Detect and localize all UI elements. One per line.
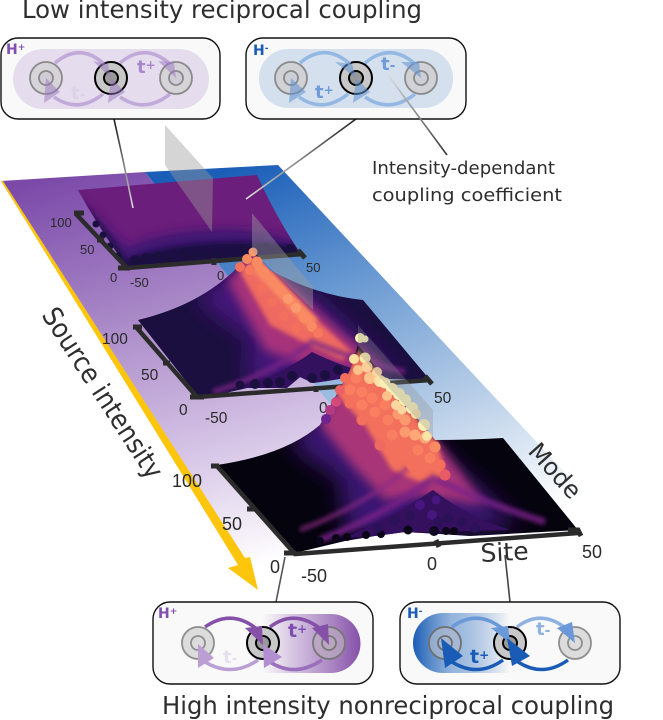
axes: high intensity	[172, 465, 602, 586]
slice plane: low intensity	[165, 125, 213, 232]
sites	[182, 627, 214, 659]
panel: high intensity H+: t	[288, 620, 297, 642]
panel: high intensity H+: t-	[223, 647, 238, 668]
axes: middle intensity: -50	[205, 410, 228, 427]
label: site: Site	[480, 537, 529, 568]
axes: middle intensity: 0	[179, 402, 188, 419]
axes: middle intensity: 100	[102, 331, 128, 348]
panel: high intensity H+	[153, 602, 373, 684]
axes: high intensity: 0	[270, 557, 280, 577]
axes: high intensity: 100	[172, 471, 202, 491]
panel: low intensity H-: t-	[381, 54, 396, 75]
label: mode: Mode	[523, 437, 587, 505]
panel: low intensity H+	[1, 38, 220, 119]
dots: high intensity scallops	[316, 496, 480, 545]
slice plane: high intensity	[358, 325, 433, 437]
surface: low intensity	[78, 175, 305, 270]
axes: high intensity: 50	[222, 514, 242, 534]
axes: high intensity: 0	[427, 554, 437, 574]
surface: high intensity	[217, 333, 578, 553]
axes: low intensity: 100	[50, 215, 72, 230]
axes: high intensity: -50	[301, 566, 327, 586]
panel: high intensity H-: +	[479, 648, 489, 662]
panel: high intensity H-	[400, 602, 620, 684]
panel: low intensity H-: +	[324, 83, 334, 97]
arrows	[205, 618, 322, 670]
callout: intensity-dependant coupling coefficient	[372, 158, 562, 206]
panel: high intensity H-: t-	[536, 619, 551, 640]
panel: low intensity H+: t-	[71, 83, 86, 104]
panel: low intensity H+: t	[137, 57, 146, 78]
panel: low intensity H-: t	[315, 82, 324, 103]
sites	[275, 62, 437, 94]
dots: high intensity peak	[321, 333, 450, 480]
axes: low intensity: 0	[110, 270, 117, 285]
panel: low intensity H+: H	[6, 42, 18, 58]
arrow: source intensity	[1, 181, 258, 590]
axes: middle intensity: 50	[141, 367, 159, 384]
axes: low intensity: 50	[306, 260, 320, 275]
slice plane: middle intensity	[252, 213, 313, 310]
panel: high intensity H+: H	[158, 606, 170, 622]
callout: intensity-dependant coupling coefficient: coupling coefficient	[372, 185, 562, 206]
mode plane	[145, 165, 600, 580]
axes: high intensity: 50	[582, 542, 602, 562]
surface: middle intensity	[138, 248, 430, 399]
axes: low intensity: -50	[130, 275, 149, 290]
panel: high intensity H+: +	[170, 607, 177, 617]
arrows	[299, 53, 415, 105]
sites	[30, 62, 192, 94]
panel: high intensity H-: t	[470, 646, 479, 668]
panel: low intensity H-: -	[265, 44, 269, 54]
axes: low intensity: 0	[217, 268, 224, 283]
axes: middle intensity: 50	[434, 390, 452, 407]
leader: t-	[388, 75, 447, 155]
axes: middle intensity: 0	[319, 400, 328, 417]
leader lines	[114, 119, 510, 602]
axes: low intensity: 50	[80, 242, 94, 257]
axes: low intensity	[50, 213, 320, 290]
panel: high intensity H+: +	[297, 622, 307, 636]
sites	[429, 627, 461, 659]
panel: low intensity H+: +	[18, 43, 25, 53]
heading: high intensity: High intensity nonreciprocal coupling	[162, 691, 614, 720]
panel: low intensity H-	[246, 38, 466, 155]
panel: low intensity H+: +	[146, 58, 156, 72]
axes: middle intensity	[102, 327, 452, 427]
panel: high intensity H-: -	[419, 607, 423, 617]
panel: low intensity H-: H	[253, 43, 265, 59]
callout: intensity-dependant coupling coefficient: Intensity-dependant	[372, 158, 555, 179]
arrows	[54, 53, 170, 105]
source intensity plane	[1, 165, 600, 600]
label: source intensity: Source intensity	[35, 302, 169, 485]
arrows	[452, 618, 568, 670]
panel: high intensity H-: H	[407, 606, 419, 622]
